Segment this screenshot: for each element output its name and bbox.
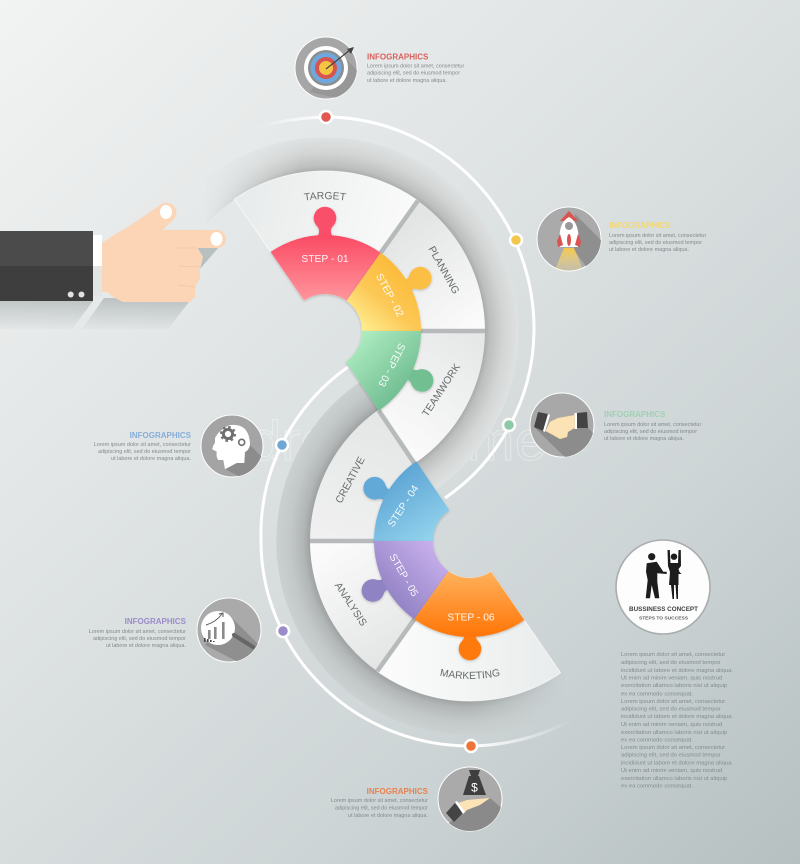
- text block: rocket: ut labore et dolore magna aliqua.: [609, 247, 689, 253]
- step labels: STEP - 04: [386, 483, 421, 529]
- icon: target with arrow: [295, 37, 362, 100]
- body text block: ex ea commodo consequat.: [621, 692, 693, 698]
- panel: target segment: [234, 171, 418, 301]
- text block: head: adipiscing elit, sed do eiusmod tempor: [98, 449, 191, 455]
- body text block: adipiscing elit, sed do eiusmod tempor: [621, 660, 721, 666]
- puzzle piece: step 01: [271, 207, 381, 301]
- watermark: dreamstime: [250, 409, 546, 472]
- step labels: STEP - 02: [373, 272, 405, 319]
- text block: handshake: Lorem ipsum dolor sit amet, consectetur: [604, 422, 701, 428]
- body text block: Lorem ipsum dolor sit amet, consectetur: [621, 699, 725, 705]
- step labels: [301, 254, 495, 624]
- body text block: exercitation ullamco laboris nisi ut aliquip: [621, 730, 728, 736]
- text block: target: adipiscing elit, sed do eiusmod tempor: [367, 70, 460, 76]
- step labels: STEP - 06: [447, 612, 495, 624]
- body text block: ex ea commodo consequat.: [621, 784, 693, 790]
- body text block: [621, 652, 733, 790]
- text block: rocket: Lorem ipsum dolor sit amet, consectetur: [609, 233, 706, 239]
- body text block: adipiscing elit, sed do eiusmod tempor: [621, 752, 721, 758]
- icon: head with gears: [200, 414, 264, 478]
- badge: business concept: BUSSINESS CONCEPT: [629, 606, 698, 613]
- text block: handshake: adipiscing elit, sed do eiusmod tempor: [604, 429, 697, 435]
- puzzle piece: step 05: [358, 541, 448, 619]
- white timeline line, lower: [261, 367, 572, 746]
- text block: money: [331, 787, 429, 819]
- badge: business concept: STEPS TO SUCCESS: [639, 616, 689, 622]
- icon: hand holding money bag: $: [471, 780, 478, 794]
- text block: money: INFOGRAPHICS: [367, 787, 429, 796]
- text block: money: Lorem ipsum dolor sit amet, consectetur: [331, 798, 428, 804]
- body text block: incididunt ut labore et dolore magna aliqua.: [621, 760, 733, 766]
- body text block: incididunt ut labore et dolore magna aliqua.: [621, 714, 733, 720]
- icon: rocket: [537, 207, 604, 272]
- icon: businesswoman silhouette: [668, 550, 682, 599]
- puzzle piece: step 03: [346, 331, 437, 411]
- text block: magnifier: ut labore et dolore magna aliqua.: [106, 643, 186, 649]
- text block: magnifier: INFOGRAPHICS: [125, 617, 187, 626]
- text block: target: [367, 52, 464, 84]
- text block: magnifier: [89, 617, 187, 649]
- text block: head: INFOGRAPHICS: [130, 431, 192, 440]
- icon: businessman silhouette: [646, 553, 667, 598]
- segment labels: [304, 192, 500, 679]
- step labels: STEP - 03: [375, 341, 407, 388]
- S-shaped grey band, lower: [293, 395, 605, 718]
- pointing hand with suit sleeve: [0, 203, 226, 329]
- text block: rocket: INFOGRAPHICS: [609, 221, 671, 230]
- text block: rocket: [609, 221, 706, 253]
- step labels: STEP - 05: [387, 552, 420, 599]
- panel: marketing segment: [377, 571, 561, 701]
- text block: magnifier: adipiscing elit, sed do eiusmod tempor: [93, 636, 186, 642]
- body text block: incididunt ut labore et dolore magna aliqua.: [621, 668, 733, 674]
- text block: handshake: ut labore et dolore magna aliqua.: [604, 436, 684, 442]
- text block: rocket: adipiscing elit, sed do eiusmod tempor: [609, 240, 702, 246]
- body text block: Ut enim ad minim veniam, quis nostrud: [621, 768, 722, 774]
- text block: target: ut labore et dolore magna aliqua.: [367, 78, 447, 84]
- text block: target: Lorem ipsum dolor sit amet, consectetur: [367, 64, 464, 70]
- segment labels: MARKETING: [440, 668, 500, 679]
- timeline dots: [276, 111, 522, 752]
- panel: teamwork segment: [346, 331, 485, 464]
- text block: handshake: INFOGRAPHICS: [604, 410, 666, 419]
- body text block: Lorem ipsum dolor sit amet, consectetur: [621, 652, 725, 658]
- puzzle piece: step 04: [359, 461, 449, 541]
- icon: hand holding money bag: [438, 766, 502, 832]
- panel: creative segment: [310, 408, 449, 541]
- text block: magnifier: Lorem ipsum dolor sit amet, consectetur: [89, 629, 186, 635]
- white timeline line, upper: [255, 117, 534, 498]
- segment labels: ANALYSIS: [332, 581, 368, 628]
- icon: handshake: [530, 392, 594, 458]
- body text block: Ut enim ad minim veniam, quis nostrud: [621, 722, 722, 728]
- puzzle piece: step 02: [346, 253, 436, 331]
- puzzle piece: step 06: [414, 571, 524, 660]
- body text block: exercitation ullamco laboris nisi ut aliquip: [621, 776, 728, 782]
- body text block: Ut enim ad minim veniam, quis nostrud: [621, 676, 722, 682]
- S-shaped grey band, upper: [190, 154, 502, 477]
- badge: business concept: [616, 540, 710, 634]
- text block: head: ut labore et dolore magna aliqua.: [111, 456, 191, 462]
- text block: money: ut labore et dolore magna aliqua.: [348, 813, 428, 819]
- body text block: ex ea commodo consequat.: [621, 738, 693, 744]
- segment labels: TEAMWORK: [421, 362, 463, 419]
- segment labels: TARGET: [304, 192, 346, 200]
- text block: money: adipiscing elit, sed do eiusmod tempor: [335, 806, 428, 812]
- body text block: adipiscing elit, sed do eiusmod tempor: [621, 706, 721, 712]
- step labels: STEP - 01: [301, 254, 349, 265]
- icon: magnifier with chart: [196, 598, 262, 662]
- text block: handshake: [604, 410, 701, 442]
- body text block: exercitation ullamco laboris nisi ut aliquip: [621, 683, 728, 689]
- panel: planning segment: [346, 201, 485, 331]
- body text block: Lorem ipsum dolor sit amet, consectetur: [621, 745, 725, 751]
- text block: head: Lorem ipsum dolor sit amet, consectetur: [94, 442, 191, 448]
- segment labels: CREATIVE: [334, 455, 368, 505]
- segment labels: PLANNING: [426, 245, 461, 296]
- text block: target: INFOGRAPHICS: [367, 52, 429, 62]
- text block: head: [94, 431, 192, 462]
- panel: analysis segment: [310, 541, 448, 671]
